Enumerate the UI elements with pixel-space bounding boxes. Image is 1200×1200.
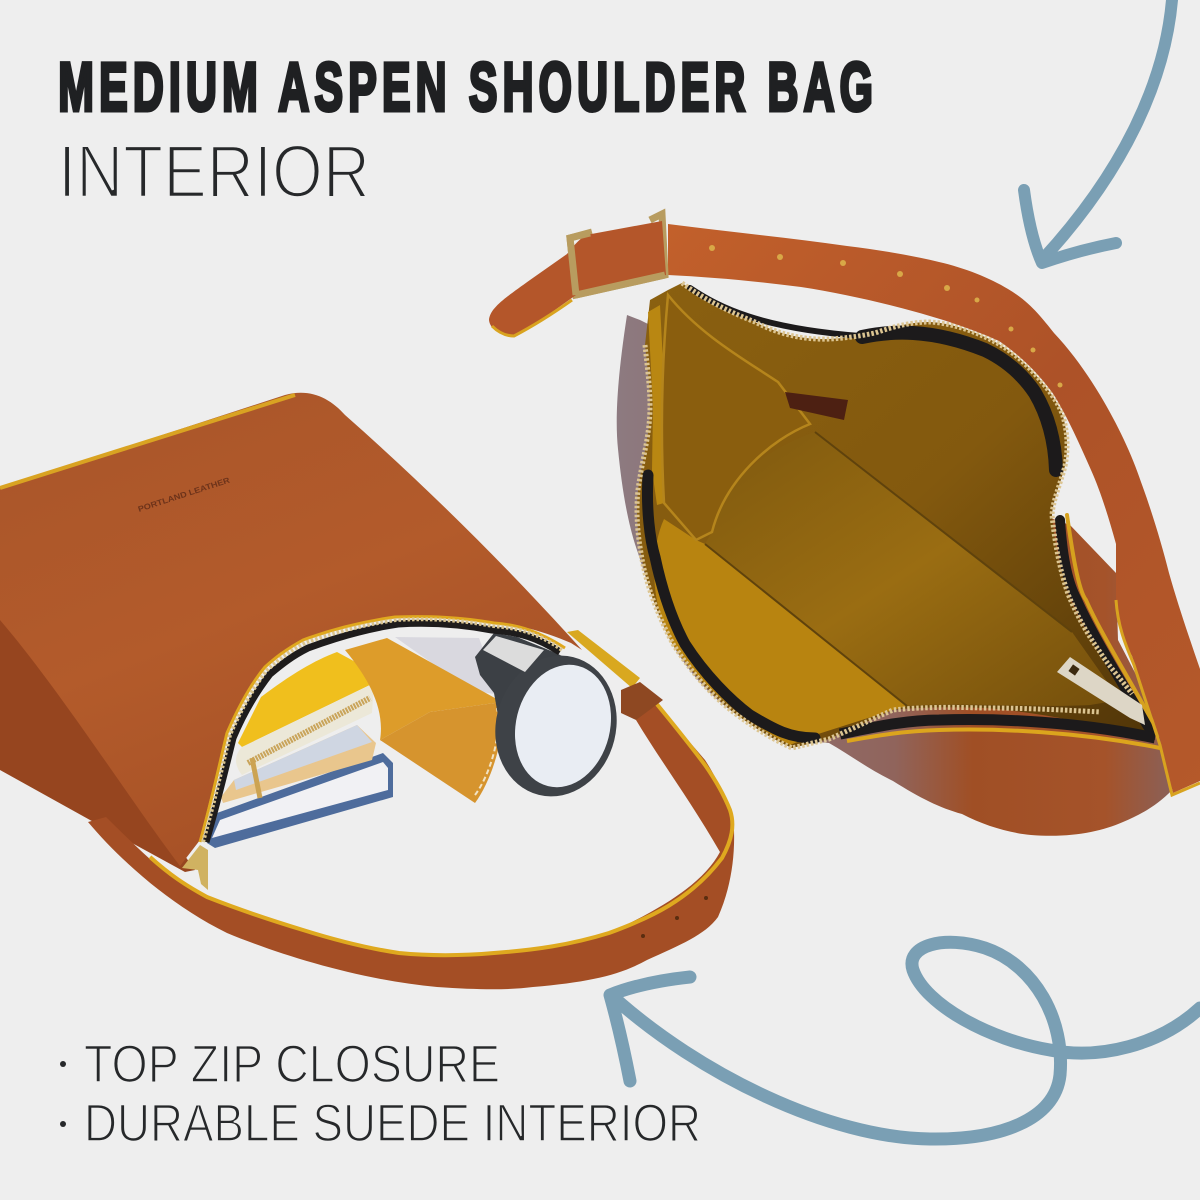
bag logo: PORTLAND LEATHER (137, 476, 231, 514)
zipper rim (200, 617, 565, 842)
tumbler lid (475, 633, 631, 809)
tumbler sleeve (395, 637, 500, 695)
strap (88, 697, 734, 989)
suede pocket (662, 295, 810, 540)
tan glasses case (345, 638, 503, 803)
zipper tape top left (690, 288, 860, 336)
zipper tape lower right (1060, 520, 1150, 730)
strap rim (1116, 600, 1200, 795)
yellow rim bottom (847, 730, 1160, 748)
yellow wallet (236, 652, 374, 798)
suede interior (637, 283, 1155, 748)
yellow rim lower right (1067, 515, 1160, 735)
strap buckle (567, 630, 663, 720)
zipper teeth (637, 283, 1132, 748)
zipper tape (206, 623, 560, 842)
zipper tape left (647, 475, 815, 738)
feature list (84, 1035, 701, 1153)
strap yellow edge (150, 697, 732, 955)
zipper pull (1057, 657, 1145, 725)
left bag (0, 393, 734, 989)
bullet dots (60, 1061, 66, 1127)
blue notebook (207, 753, 393, 848)
pale book (221, 725, 376, 803)
suede seams (705, 432, 1072, 706)
bullet: durable suede interior: DURABLE SUEDE INTERIOR (84, 1094, 701, 1153)
bag zipper pull (182, 845, 208, 890)
zipper tape bottom (840, 720, 1155, 738)
zipper tape top (862, 333, 1056, 470)
strap tail yellow edge (492, 300, 572, 336)
zipper teeth (203, 619, 562, 842)
title: MEDIUM ASPEN SHOULDER BAG (58, 49, 873, 126)
strap holes (641, 896, 708, 938)
suede left strip (648, 305, 666, 505)
bag body (0, 393, 582, 866)
arrow: top right (1024, 0, 1172, 263)
bag side panel (0, 600, 195, 872)
suede gold band (654, 519, 907, 745)
arrow: bottom looping (610, 942, 1200, 1139)
strap holes (709, 245, 1062, 388)
suede center panel (705, 432, 1120, 706)
interior tag (785, 392, 848, 420)
brass buckle (570, 214, 665, 295)
bag rear shell (617, 315, 1172, 836)
strap tail (489, 221, 666, 335)
right bag (489, 214, 1200, 836)
subtitle: INTERIOR (58, 130, 370, 213)
bag top yellow edge (0, 395, 295, 488)
bullet: top zip closure: TOP ZIP CLOSURE (84, 1035, 500, 1094)
buckle front bar (570, 233, 665, 295)
right strap (668, 224, 1200, 793)
